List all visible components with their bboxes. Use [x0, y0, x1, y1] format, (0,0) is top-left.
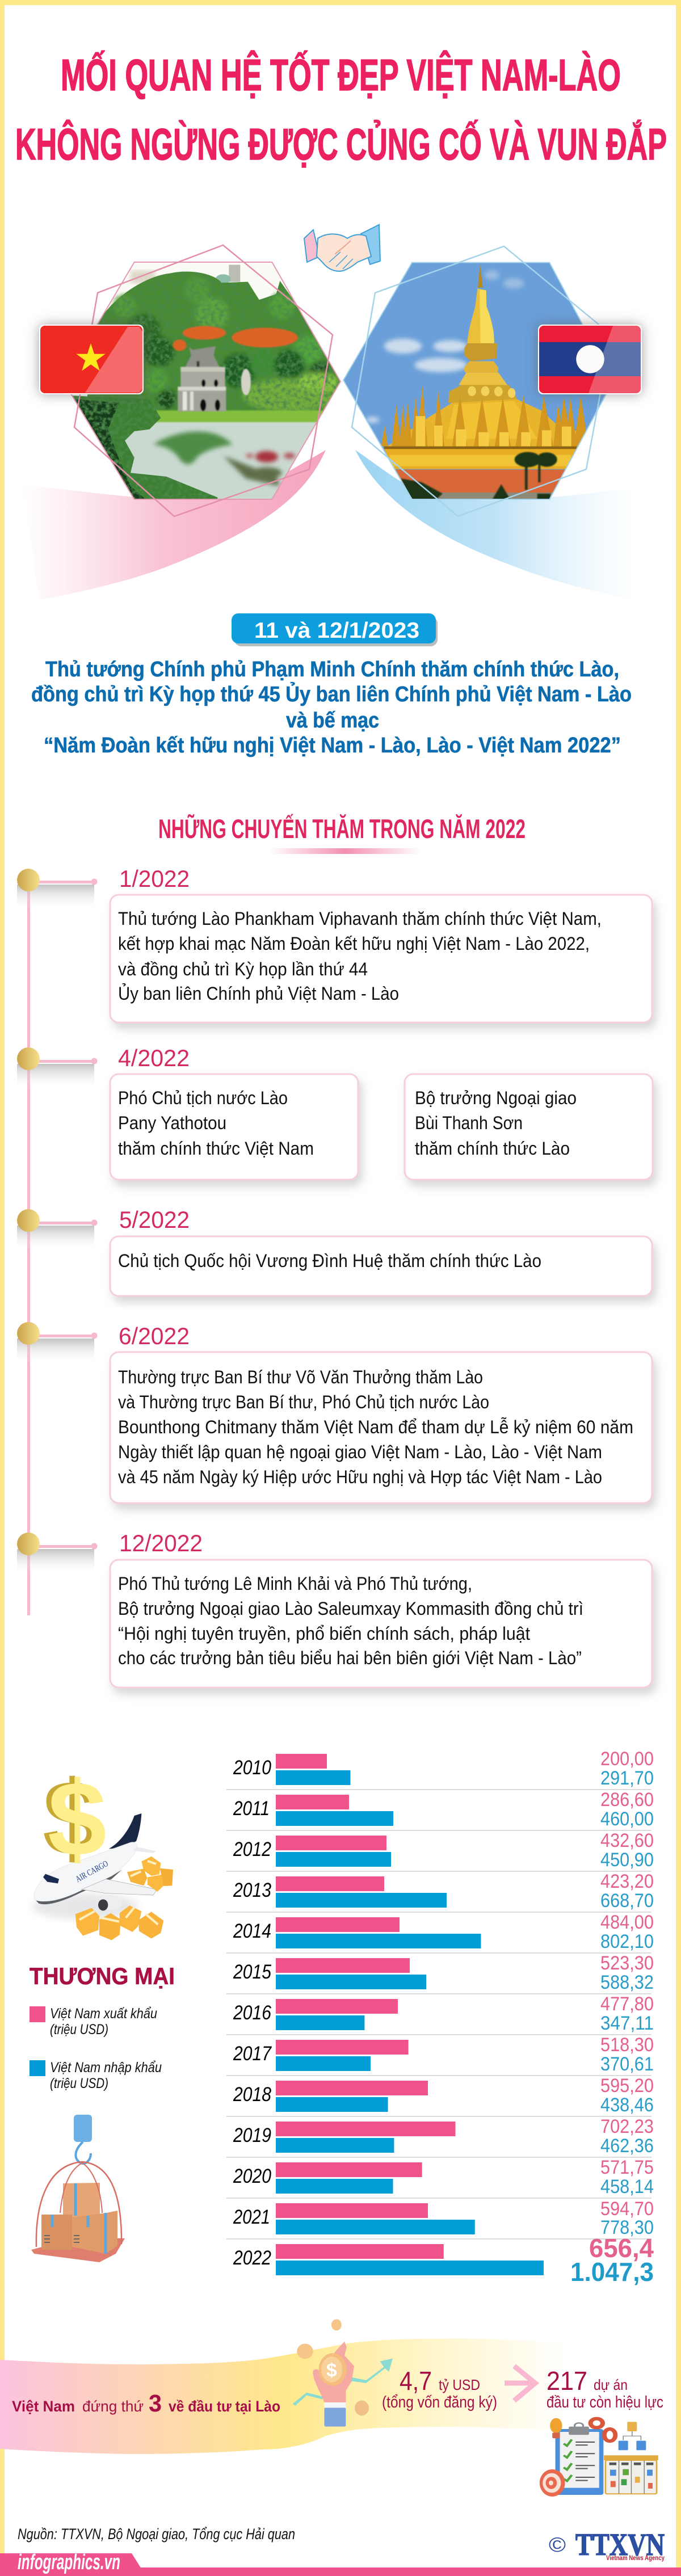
- icon: handshake: [304, 225, 380, 271]
- timeline: 6/2022: và 45 năm Ngày ký Hiệp ước Hữu nghị và Hợp tác Việt Nam - Lào: [118, 1467, 602, 1487]
- row 2010: 200,00: [600, 1748, 654, 1770]
- row 2011: 2011: [233, 1798, 270, 1820]
- intro text: đồng chủ trì Kỳ họp thứ 45 Ủy ban liên Chính phủ Việt Nam - Lào: [31, 681, 632, 706]
- timeline: 5/2022: Chủ tịch Quốc hội Vương Đình Huệ thăm chính thức Lào: [118, 1251, 541, 1271]
- icon: air cargo plane with dollar sign: AIR CARGO: [74, 1859, 110, 1884]
- row 2020: 458,14: [600, 2176, 654, 2198]
- row 2021: 594,70: [600, 2198, 654, 2220]
- blue swoosh: [355, 450, 634, 600]
- timeline: 4/2022: thăm chính thức Việt Nam: [118, 1138, 314, 1159]
- heading: trade: THƯƠNG MẠI: [30, 1963, 175, 1989]
- row 2011: [233, 1789, 654, 1830]
- pink hexagon outline: [74, 245, 333, 516]
- intro text: và bế mạc: [286, 709, 379, 733]
- timeline: 5/2022: 5/2022: [119, 1206, 190, 1233]
- row 2016: [233, 1993, 654, 2034]
- flame trees: [173, 326, 298, 351]
- row 2019: 702,23: [600, 2116, 654, 2137]
- legend: [30, 2006, 162, 2091]
- icon: air cargo plane with dollar sign: $: [43, 1758, 102, 1877]
- investment ranking text: về đầu tư tại Lào: [169, 2398, 280, 2415]
- flag: Vietnam: [39, 325, 144, 394]
- foreground foliage: [62, 395, 217, 501]
- row 2011: 286,60: [600, 1789, 654, 1811]
- stat: registered capital: [382, 2366, 497, 2411]
- intro text: [31, 658, 632, 757]
- stat: registered capital: 4,7: [400, 2366, 432, 2396]
- timeline: 12/2022: [17, 1530, 652, 1687]
- row 2013: 2013: [233, 1879, 271, 1901]
- logo: TTXVN: Vietnam News Agency: [606, 2554, 665, 2562]
- row 2012: [233, 1830, 654, 1871]
- timeline: 6/2022: và Thường trực Ban Bí thư, Phó Chủ tịch nước Lào: [118, 1392, 489, 1412]
- title: [15, 50, 667, 169]
- timeline: 6/2022: Bounthong Chitmany thăm Việt Nam để tham dự Lễ kỷ niệm 60 năm: [118, 1417, 633, 1437]
- row 2011: 460,00: [600, 1808, 654, 1830]
- row 2013: [233, 1871, 654, 1912]
- row 2022: 2022: [233, 2247, 271, 2269]
- row 2020: 2020: [233, 2165, 271, 2187]
- date badge: 11 và 12/1/2023: [254, 618, 419, 643]
- timeline: 1/2022: và đồng chủ trì Kỳ họp lần thứ 44: [118, 959, 368, 979]
- row 2017: 518,30: [600, 2034, 654, 2056]
- icon: air cargo plane with dollar sign: $: [48, 1760, 107, 1878]
- investment ranking text: Việt Nam: [12, 2398, 75, 2415]
- legend: Việt Nam xuất khẩu: [50, 2006, 157, 2022]
- timeline: 6/2022: Thường trực Ban Bí thư Võ Văn Thưởng thăm Lào: [118, 1367, 483, 1387]
- legend: Việt Nam nhập khẩu: [50, 2060, 162, 2076]
- timeline: 12/2022: Bộ trưởng Ngoại giao Lào Saleumxay Kommasith đồng chủ trì: [118, 1598, 583, 1619]
- row 2022: 1.047,3: [570, 2257, 654, 2287]
- row 2014: 802,10: [600, 1931, 654, 1952]
- intro text: “Năm Đoàn kết hữu nghị Việt Nam - Lào, Lào - Việt Nam 2022”: [44, 734, 621, 757]
- icon: hand holding coin: $: [326, 2360, 337, 2381]
- row 2013: 668,70: [600, 1890, 654, 1912]
- row 2017: [233, 2034, 654, 2075]
- row 2014: 484,00: [600, 1912, 654, 1933]
- row 2013: 423,20: [600, 1871, 654, 1892]
- investment ribbon: [0, 2338, 568, 2454]
- row 2018: 595,20: [600, 2075, 654, 2097]
- pink swoosh: [23, 450, 326, 600]
- stat: projects: 217: [547, 2366, 587, 2396]
- footer bar: infographics.vn: [18, 2550, 120, 2574]
- row 2018: [233, 2075, 654, 2116]
- timeline: 6/2022: [17, 1322, 652, 1503]
- timeline: 4/2022: Pany Yathotou: [118, 1113, 226, 1133]
- investment ranking text: đứng thứ: [82, 2398, 144, 2415]
- row 2017: 370,61: [600, 2053, 654, 2075]
- timeline: 4/2022: Bộ trưởng Ngoại giao: [415, 1088, 577, 1108]
- timeline: 1/2022: [17, 865, 652, 1022]
- row 2015: 2015: [233, 1961, 271, 1983]
- timeline: 12/2022: cho các trưởng bản tiêu biểu hai bên biên giới Việt Nam - Lào”: [118, 1648, 582, 1668]
- source note: Nguồn: TTXVN, Bộ Ngoại giao, Tổng cục Hải quan: [18, 2526, 295, 2543]
- timeline: 1/2022: 1/2022: [119, 865, 190, 892]
- row 2016: 477,80: [600, 1993, 654, 2015]
- blue hexagon outline: [352, 246, 611, 516]
- timeline: 6/2022: 6/2022: [119, 1323, 190, 1349]
- row 2020: [233, 2157, 654, 2198]
- row 2018: 2018: [233, 2083, 271, 2106]
- timeline: 5/2022: [17, 1206, 652, 1296]
- row 2019: [233, 2116, 654, 2157]
- row 2019: 2019: [233, 2124, 271, 2146]
- timeline: 1/2022: Ủy ban liên Chính phủ Việt Nam - Lào: [118, 983, 399, 1004]
- date badge: [232, 613, 438, 646]
- bar chart: trade by year: [226, 1748, 654, 2287]
- stat: registered capital: tỷ USD: [439, 2376, 480, 2393]
- row 2021: [233, 2198, 654, 2238]
- row 2016: 2016: [233, 2002, 271, 2024]
- logo: TTXVN: ©: [549, 2533, 566, 2556]
- icon: crane hook with parcels: [31, 2115, 125, 2262]
- timeline: 12/2022: 12/2022: [119, 1530, 203, 1556]
- timeline: 6/2022: Ngày thiết lập quan hệ ngoại giao Việt Nam - Lào, Lào - Việt Nam: [118, 1442, 602, 1462]
- row 2012: 432,60: [600, 1830, 654, 1851]
- footer bar: [0, 2550, 681, 2576]
- legend: (triệu USD): [50, 2022, 108, 2038]
- row 2010: 291,70: [600, 1767, 654, 1789]
- timeline: 12/2022: Phó Thủ tướng Lê Minh Khải và Phó Thủ tướng,: [118, 1573, 472, 1594]
- row 2016: 347,11: [600, 2013, 654, 2034]
- photo: Hoan Kiem lake and Turtle Tower: [62, 261, 342, 501]
- row 2020: 571,75: [600, 2157, 654, 2178]
- investment ranking text: 3: [149, 2390, 162, 2417]
- row 2015: [233, 1952, 654, 1993]
- flag: Laos: [538, 325, 642, 394]
- row 2015: 588,32: [600, 1972, 654, 1993]
- photo: That Luang stupa: [340, 261, 615, 501]
- timeline: 12/2022: “Hội nghị tuyên truyền, phổ biến chính sách, pháp luật: [118, 1623, 530, 1644]
- timeline: 4/2022: Bùi Thanh Sơn: [415, 1113, 523, 1133]
- icon: air cargo plane with dollar sign: [32, 1758, 173, 1940]
- timeline: 4/2022: 4/2022: [118, 1045, 190, 1071]
- stat: projects: [547, 2366, 663, 2411]
- row 2012: 2012: [233, 1838, 271, 1861]
- stat: registered capital: (tổng vốn đăng ký): [382, 2393, 497, 2411]
- turtle tower: [178, 346, 226, 411]
- timeline: 4/2022: thăm chính thức Lào: [415, 1138, 570, 1159]
- investment ranking text: [12, 2390, 280, 2417]
- logo: TTXVN: [549, 2527, 665, 2562]
- timeline: 1/2022: Thủ tướng Lào Phankham Viphavanh thăm chính thức Việt Nam,: [118, 908, 602, 929]
- row 2021: 2021: [233, 2206, 270, 2228]
- timeline: 4/2022: Phó Chủ tịch nước Lào: [118, 1088, 288, 1108]
- row 2010: 2010: [233, 1757, 271, 1779]
- timeline: 1/2022: kết hợp khai mạc Năm Đoàn kết hữu nghị Việt Nam - Lào 2022,: [118, 933, 590, 954]
- icon: hand holding coin: [293, 2319, 393, 2427]
- legend: (triệu USD): [50, 2076, 108, 2091]
- arrow: [505, 2366, 535, 2401]
- row 2017: 2017: [233, 2043, 272, 2065]
- row 2021: 778,30: [600, 2217, 654, 2238]
- stat: projects: dự án: [594, 2376, 628, 2393]
- row 2014: [233, 1912, 654, 1952]
- row 2018: 438,46: [600, 2094, 654, 2116]
- timeline spine: [27, 885, 30, 1615]
- timeline: 4/2022: [17, 1045, 653, 1180]
- row 2022: 656,4: [589, 2233, 654, 2263]
- row 2015: 523,30: [600, 1952, 654, 1974]
- icon: project checklist: [540, 2418, 658, 2497]
- row 2014: 2014: [233, 1920, 271, 1942]
- row 2012: 450,90: [600, 1849, 654, 1871]
- row 2010: [233, 1748, 654, 1789]
- row 2019: 462,36: [600, 2135, 654, 2157]
- tree canopy: [87, 272, 340, 416]
- intro text: Thủ tướng Chính phủ Phạm Minh Chính thăm chính thức Lào,: [45, 658, 619, 681]
- row 2022: [233, 2233, 654, 2287]
